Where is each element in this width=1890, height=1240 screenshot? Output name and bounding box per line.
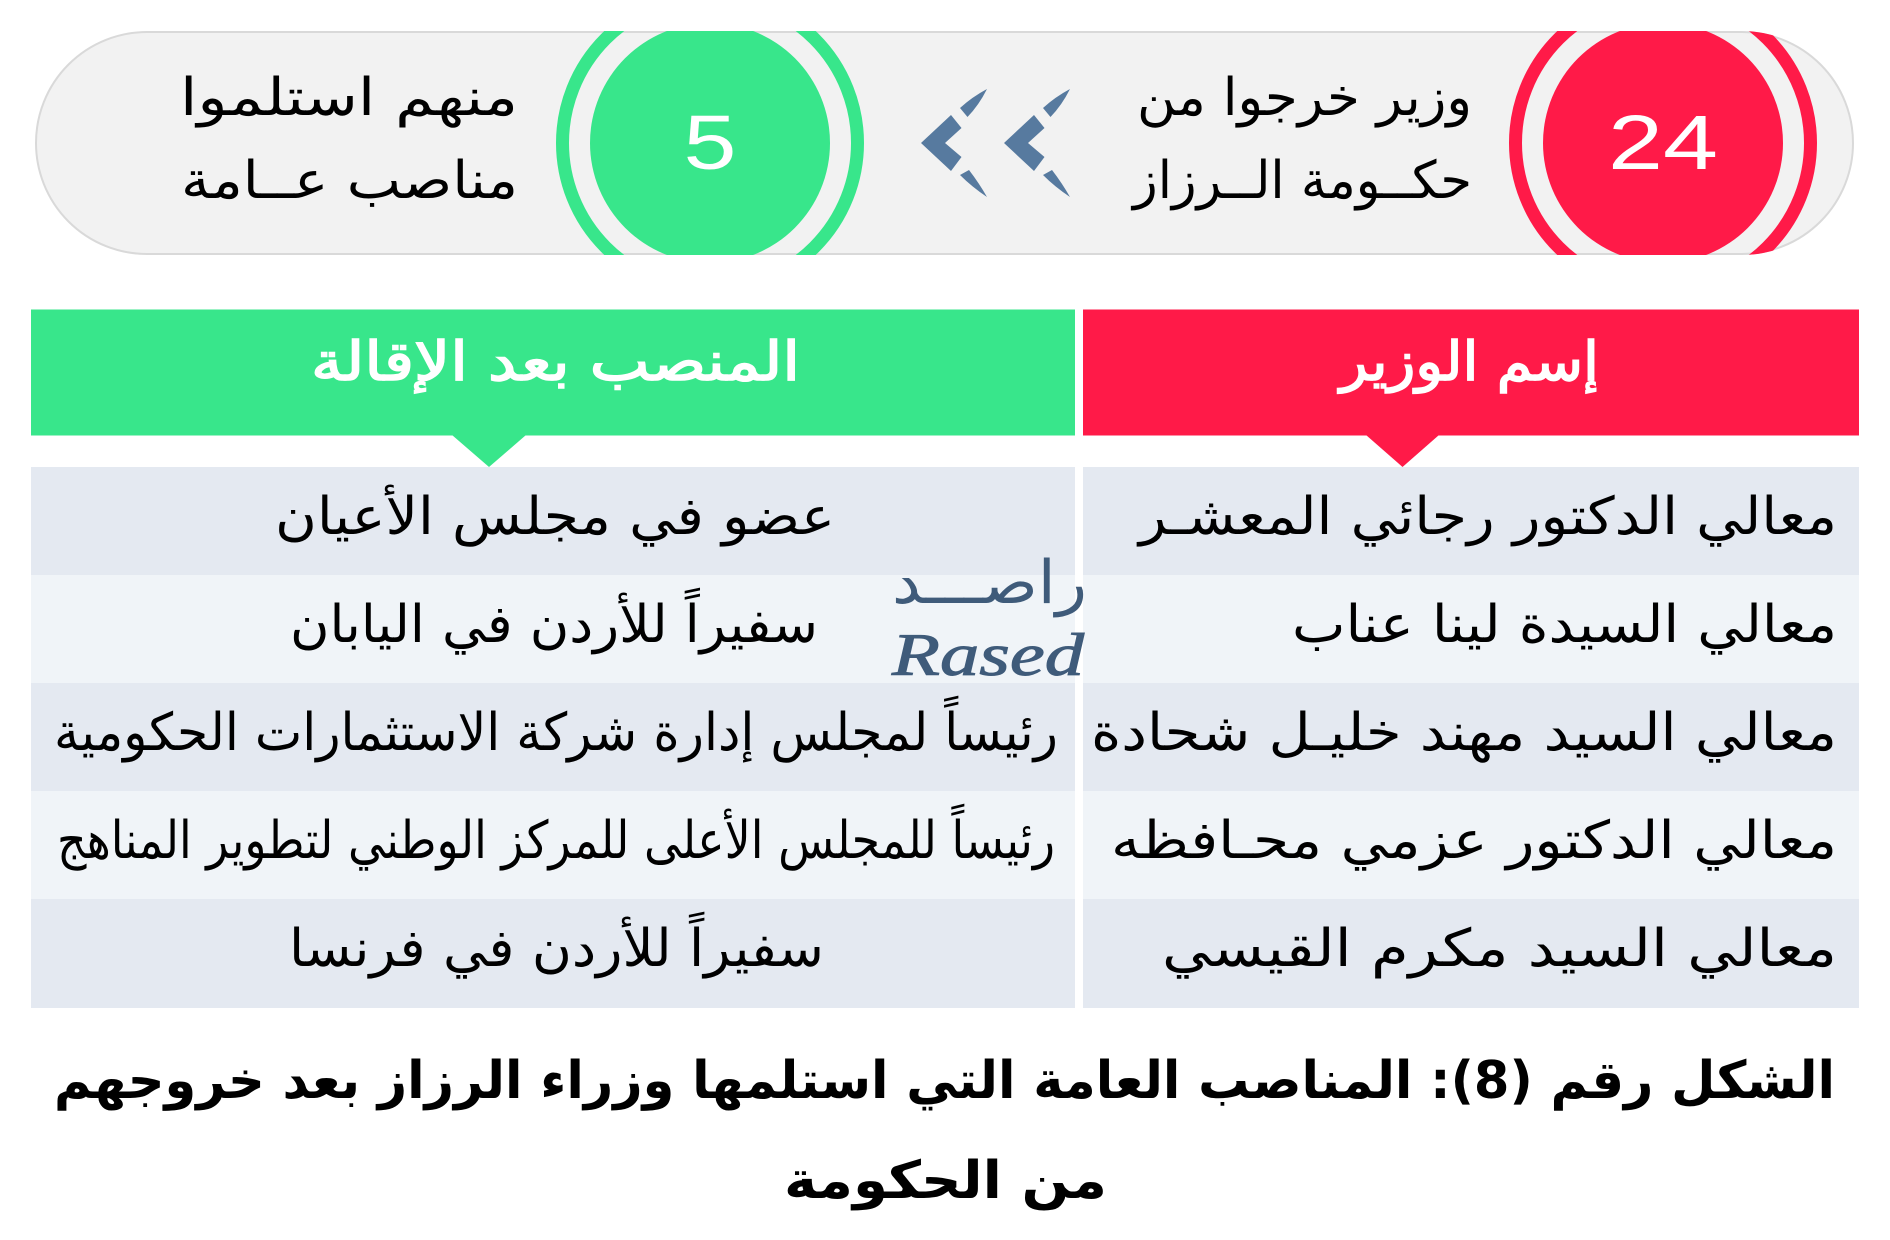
caption: من الحكومة: [784, 1151, 1107, 1211]
row 1: معالي الدكتور رجائي المعشـر: [1136, 487, 1837, 547]
table header: position after dismissal: المنصب بعد الإقالة: [311, 330, 800, 393]
row 3: معالي السيد مهند خليـل شحادة: [1091, 703, 1837, 763]
text: ministers who left: [1130, 68, 1472, 211]
watermark: Rased: Rased: [891, 622, 1085, 688]
green number circle: [556, 31, 864, 255]
row 1: [31, 467, 1859, 575]
watermark: Rased: [891, 548, 1087, 688]
red number circle: 24: [1608, 100, 1718, 186]
row 2: [31, 575, 1859, 683]
row 5: معالي السيد مكرم القيسي: [1162, 919, 1837, 979]
row 4: [31, 791, 1859, 899]
summary pill: [35, 31, 1854, 255]
caption: [54, 1051, 1835, 1211]
row 5: [31, 899, 1859, 1008]
table rows: [31, 467, 1859, 1008]
caption: الشكل رقم (8): المناصب العامة التي استلمها وزراء الرزاز بعد خروجهم: [54, 1051, 1835, 1111]
text: took public posts: منهم استلموا: [180, 68, 518, 128]
watermark: Rased: راصـــد: [892, 548, 1087, 618]
text: ministers who left: حكــومة الــرزاز: [1130, 151, 1472, 211]
red number circle: [1509, 31, 1817, 255]
table header: minister name: [1083, 310, 1859, 467]
green number circle: 5: [684, 100, 736, 186]
row 2: معالي السيدة لينا عناب: [1292, 595, 1837, 655]
row 2: سفيراً للأردن في اليابان: [290, 588, 818, 655]
row 3: [31, 683, 1859, 791]
row 3: رئيساً لمجلس إدارة شركة الاستثمارات الحكومية: [54, 696, 1058, 763]
table header: minister name: إسم الوزير: [1337, 330, 1599, 393]
text: ministers who left: وزير خرجوا من: [1137, 68, 1472, 128]
row 4: رئيساً للمجلس الأعلى للمركز الوطني لتطوير المناهج: [57, 804, 1055, 871]
text: took public posts: مناصب عــامة: [181, 151, 518, 211]
icon: double chevron arrow: [921, 89, 1070, 197]
row 5: سفيراً للأردن في فرنسا: [289, 912, 824, 979]
table header: position after dismissal: [31, 310, 1075, 467]
row 1: عضو في مجلس الأعيان: [275, 484, 835, 547]
row 4: معالي الدكتور عزمي محـافظه: [1111, 811, 1837, 871]
text: took public posts: [180, 68, 518, 211]
